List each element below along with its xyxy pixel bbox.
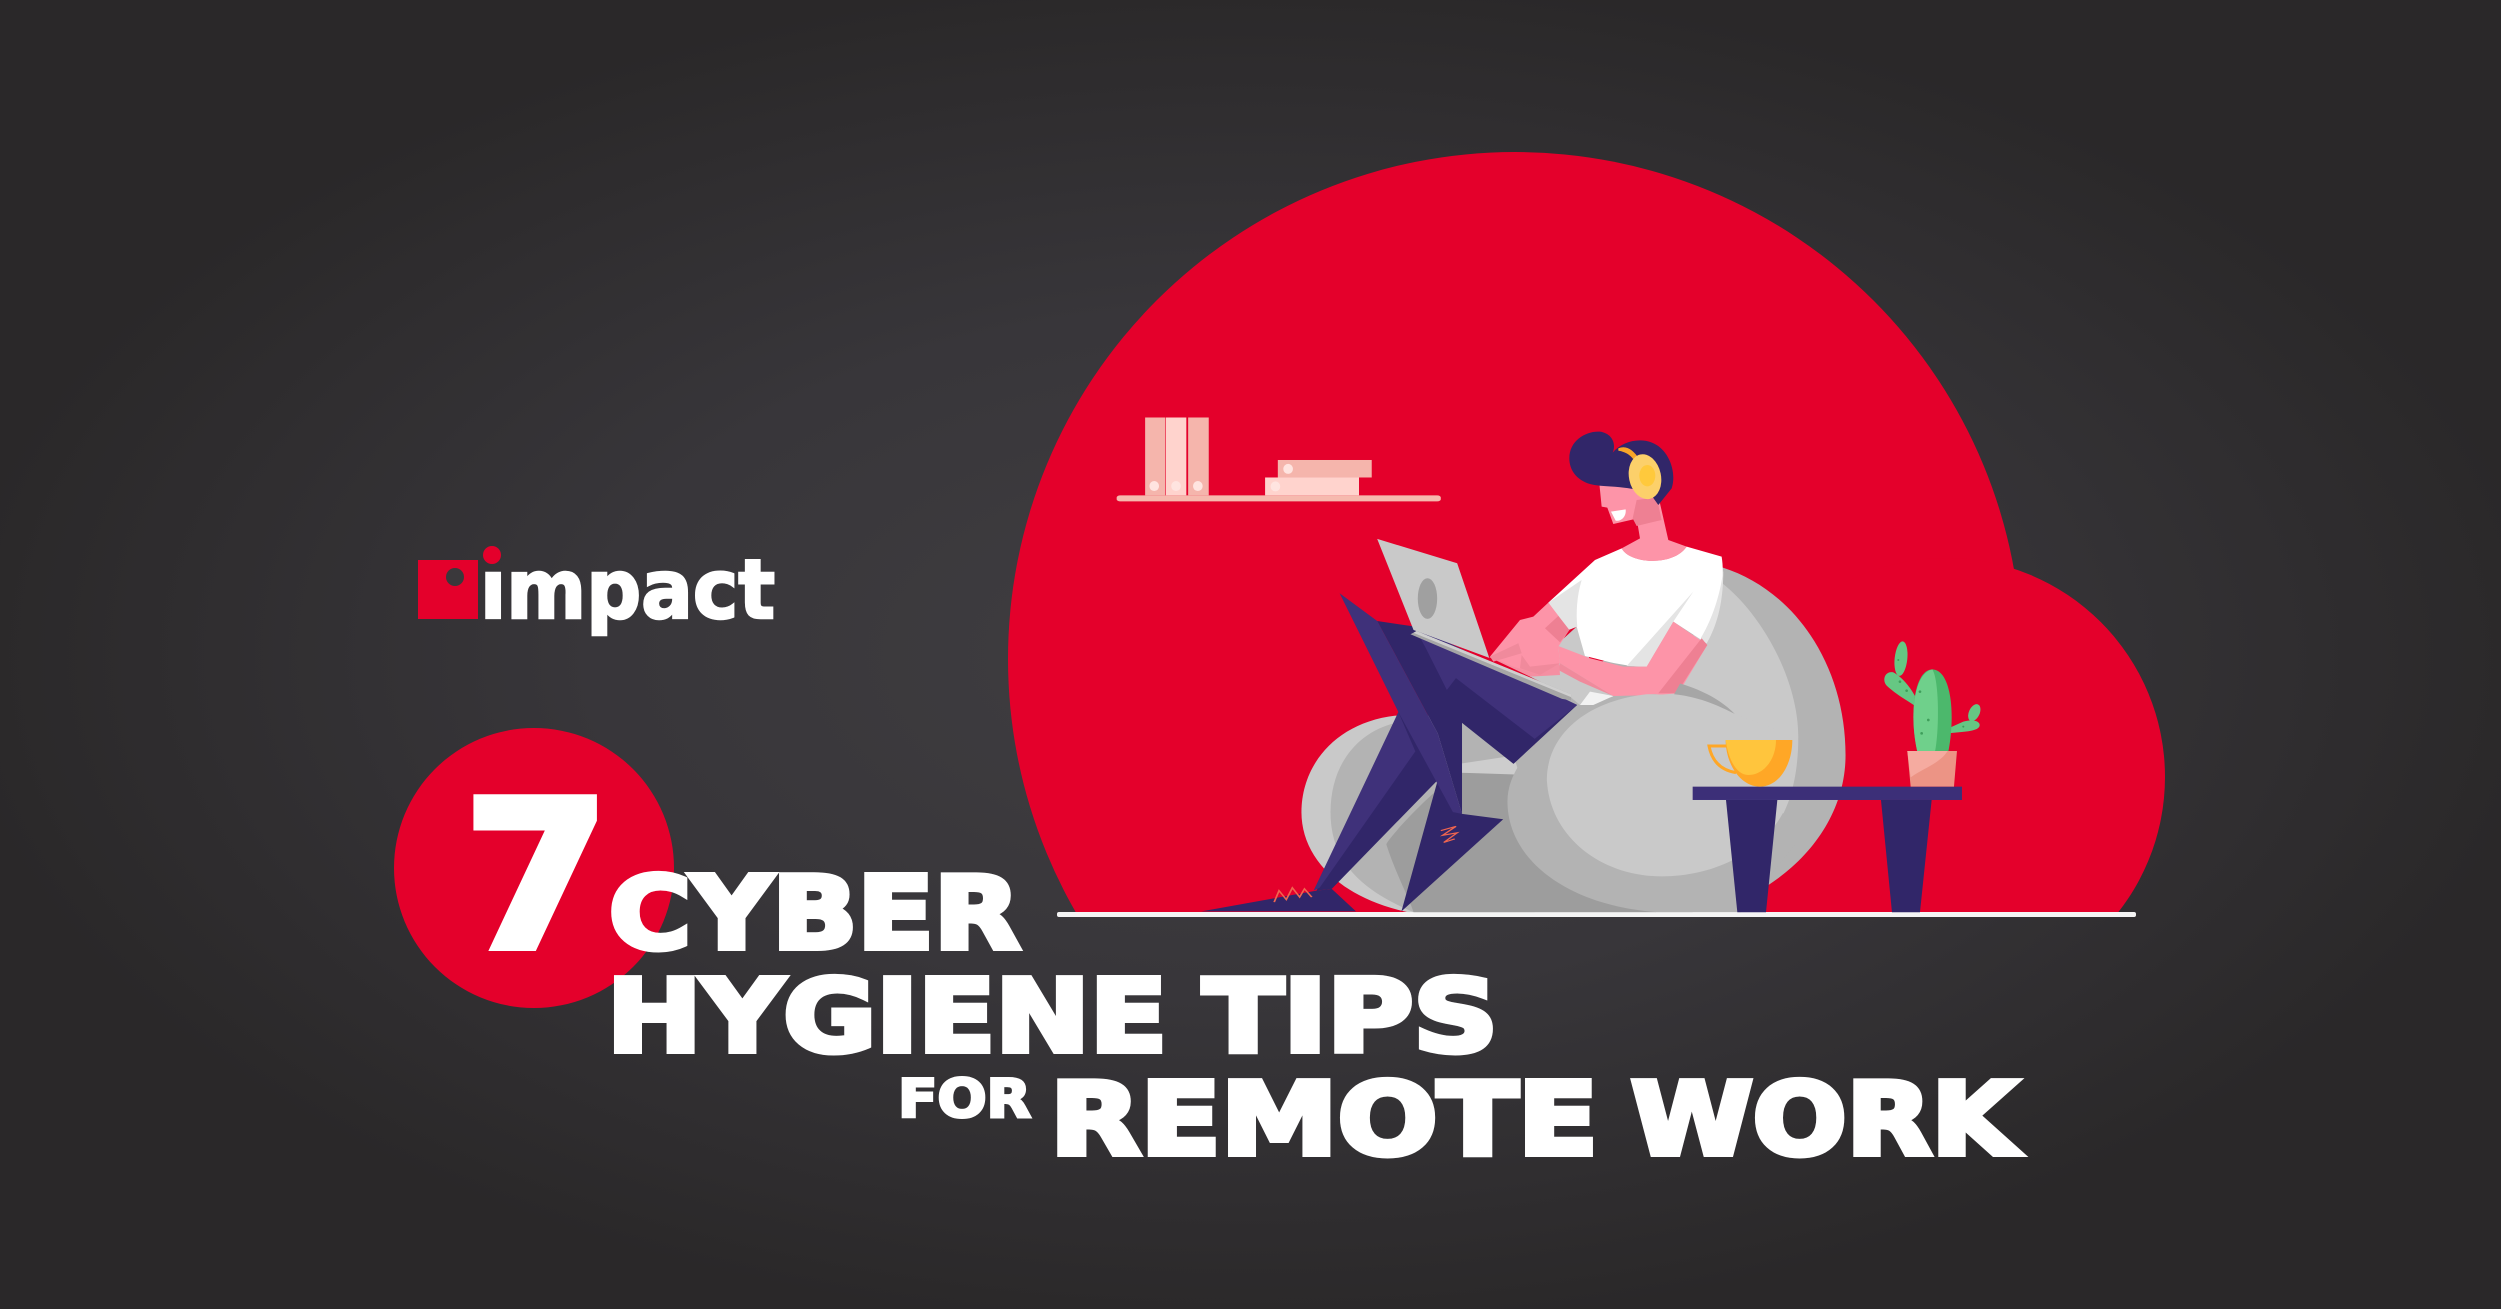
hair [1569, 432, 1673, 505]
table, cup and cactus [1693, 641, 1983, 912]
title line 3: REMOTE WORK: WORK [1631, 1061, 2021, 1178]
small word: FOR: FOR [898, 1069, 1031, 1130]
pot [1907, 751, 1957, 787]
title line 2: HYGIENE TIPS: HYGIENE [607, 958, 1167, 1075]
title [607, 855, 2021, 1178]
headphones [1618, 447, 1665, 502]
shelf with books [1117, 417, 1441, 501]
logo: impact [418, 543, 775, 638]
mouth [1611, 509, 1626, 521]
bean bag front [1507, 684, 1795, 912]
number 7: 7 [464, 759, 610, 996]
laptop [1377, 539, 1571, 700]
table [1693, 787, 1962, 912]
red cloud [1008, 152, 2165, 912]
logo wordmark: impact [480, 543, 775, 638]
cup [1709, 740, 1792, 787]
illustration: person on bean bag [1117, 417, 1983, 912]
shirt [1548, 547, 1723, 667]
title line 2: HYGIENE TIPS [607, 958, 1498, 1075]
cactus [1884, 641, 1983, 752]
legs [1201, 593, 1577, 911]
floor line [1057, 912, 2136, 917]
logo mark [418, 546, 501, 619]
neck and face [1599, 483, 1687, 561]
title line 3: REMOTE WORK: REMOTE [1050, 1061, 1598, 1178]
title line 1: CYBER: CYBER [609, 855, 1020, 972]
title line 3: REMOTE WORK [1050, 1061, 2021, 1178]
title line 2: HYGIENE TIPS: TIPS [1203, 958, 1498, 1075]
person upper body [1489, 432, 1723, 705]
bean bag back [1301, 567, 1846, 912]
arms [1558, 622, 1707, 696]
red number circle [394, 728, 674, 1008]
